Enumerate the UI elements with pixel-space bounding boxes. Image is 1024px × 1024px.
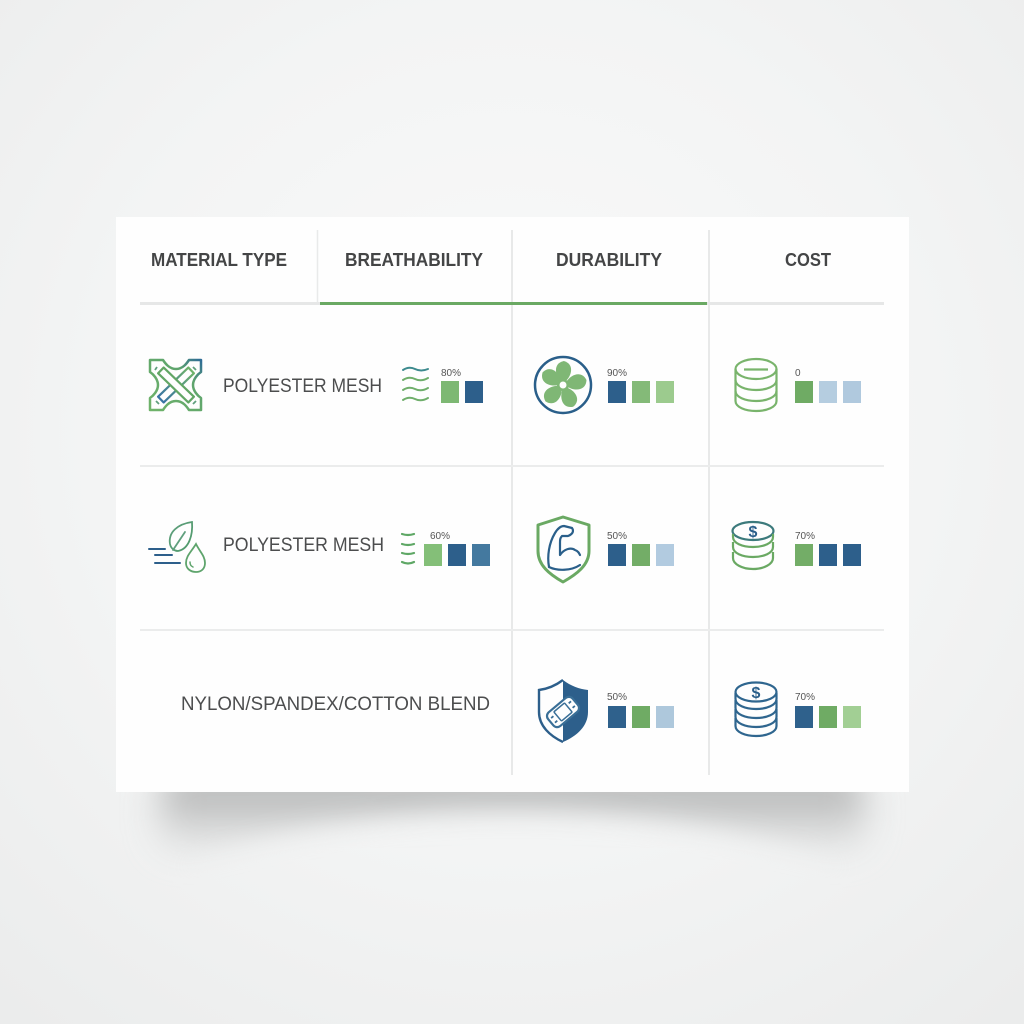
icon: leaf and water drop	[149, 522, 205, 572]
cost rating row 3	[795, 692, 861, 728]
durability rating row 1	[607, 368, 674, 403]
durability rating row 2	[607, 531, 674, 566]
durability rating row 1: 90%	[607, 368, 627, 379]
cost rating row 1	[795, 368, 861, 403]
row 3 material name: NYLON/SPANDEX/COTTON BLEND	[181, 694, 490, 715]
durability rating row 2: 50%	[607, 531, 627, 542]
cost rating row 3: 70%	[795, 692, 815, 703]
green header underline	[320, 302, 707, 305]
table grid lines	[140, 230, 884, 775]
icon: green coin stack with dollar: $	[749, 524, 758, 541]
cost rating row 1: 0	[795, 368, 801, 379]
icon: blue coin stack with dollar: $	[752, 685, 761, 702]
icon: shield with flexed arm	[538, 517, 589, 582]
icon: half-filled shield with bandage	[539, 680, 588, 742]
header row: DURABILITY	[556, 250, 662, 270]
icon: green coin stack with dollar	[732, 522, 774, 569]
durability rating row 3	[607, 692, 674, 728]
row 2 material name: POLYESTER MESH	[223, 535, 384, 556]
header row: COST	[785, 250, 831, 270]
breathability rating row 1	[441, 368, 483, 403]
row 1 material name: POLYESTER MESH	[223, 376, 382, 397]
cost rating row 2	[795, 531, 861, 566]
icon: stacked database coins	[736, 359, 776, 411]
icon: woven mesh	[150, 360, 201, 410]
breathability rating row 1: 80%	[441, 368, 461, 379]
card shadow	[146, 792, 879, 852]
breathability rating row 2: 60%	[430, 531, 450, 542]
comparison table card	[116, 217, 909, 792]
icon: fan	[535, 357, 591, 413]
icon: chevron air flow	[402, 534, 414, 564]
icon: blue coin stack with dollar	[736, 682, 776, 736]
breathability rating row 2	[424, 531, 490, 566]
icon: air waves	[403, 368, 428, 400]
header row	[151, 250, 831, 270]
durability rating row 3: 50%	[607, 692, 627, 703]
header row: MATERIAL TYPE	[151, 250, 287, 270]
header row: BREATHABILITY	[345, 250, 483, 270]
cost rating row 2: 70%	[795, 531, 815, 542]
